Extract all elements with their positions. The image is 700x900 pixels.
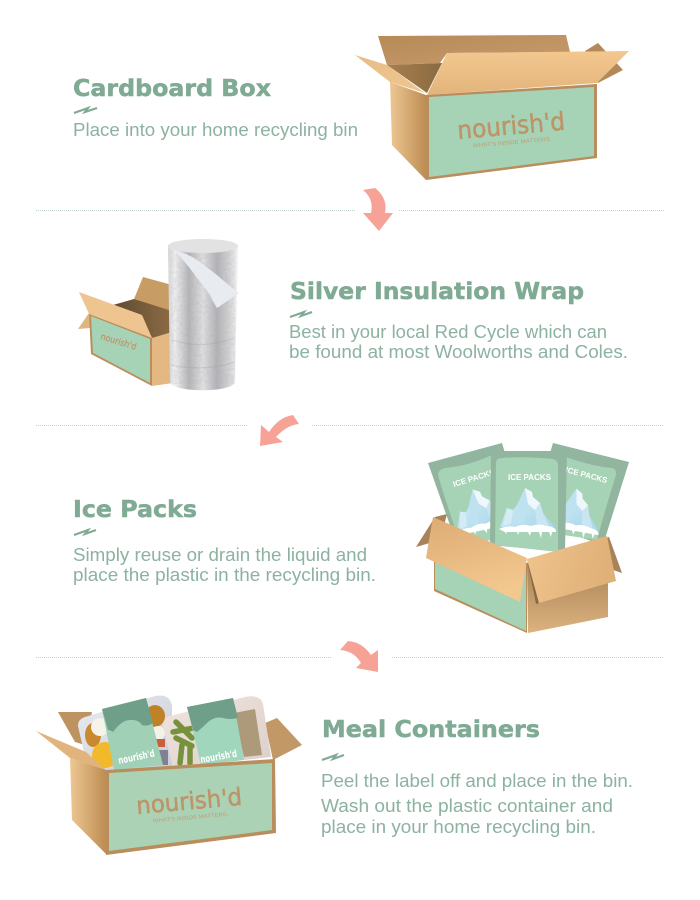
logo: nourish'd	[456, 107, 566, 145]
box left flap	[36, 731, 106, 770]
sleeve top	[187, 698, 238, 732]
food right	[145, 705, 165, 727]
box front	[434, 558, 527, 633]
pack inner	[438, 453, 525, 548]
icon: squiggle	[74, 108, 97, 113]
icon: squiggle	[290, 312, 312, 317]
ice pack left	[428, 443, 525, 548]
illustration: meal containers in box	[36, 695, 302, 855]
section: silver wrap text	[289, 279, 628, 362]
roll texture	[170, 250, 235, 384]
ice pack centre	[490, 451, 567, 552]
box rear right flap	[585, 43, 623, 83]
roll body	[168, 245, 238, 390]
sleeve body	[102, 698, 163, 770]
box side	[70, 758, 106, 854]
grain	[234, 709, 262, 757]
box front label	[435, 558, 526, 631]
box rear left flap	[58, 712, 92, 745]
food orange	[85, 723, 101, 747]
divider 1	[36, 210, 664, 212]
body text: Best in your local Red Cycle which can	[289, 322, 607, 342]
box right side	[152, 332, 173, 386]
tray right	[163, 696, 271, 768]
illustration: open cardboard box with nourish'd logo	[355, 35, 629, 180]
box label	[109, 763, 272, 851]
body text line 3: place in your home recycling bin.	[321, 817, 596, 837]
pack inner	[495, 457, 558, 552]
tray body	[163, 696, 271, 768]
logo: nourish'd	[135, 783, 243, 820]
curled sheet	[173, 250, 239, 308]
arrow 1	[363, 188, 393, 231]
yellow soup	[92, 742, 118, 768]
iceberg	[449, 483, 511, 541]
pack title: ICE PACKS	[564, 465, 609, 485]
pack body	[428, 443, 525, 548]
food white	[91, 718, 109, 736]
box interior	[113, 299, 172, 338]
section: ice packs text	[73, 497, 376, 585]
food egg	[151, 726, 165, 740]
tray left	[78, 695, 172, 770]
tray body	[78, 695, 172, 770]
iceberg	[544, 485, 605, 541]
pack title: ICE PACKS	[452, 468, 496, 489]
box rear left flap	[416, 514, 447, 547]
sleeve logo: nourish'd	[200, 749, 238, 766]
divider 3	[36, 656, 664, 658]
roll seams	[171, 338, 235, 368]
bean 1	[176, 722, 192, 738]
box rear flap	[134, 277, 172, 312]
sleeve logo: nourish'd	[117, 748, 156, 767]
green beans	[173, 722, 194, 763]
bean 2	[173, 728, 194, 732]
sleeve left	[102, 698, 163, 770]
bean 4	[180, 745, 182, 763]
section: cardboard box text	[73, 76, 358, 140]
roll top	[168, 239, 238, 253]
body text: Peel the label off and place in the bin.	[321, 771, 633, 791]
arrow 3	[340, 641, 378, 672]
sleeve top	[102, 698, 153, 732]
box front flap	[79, 292, 152, 338]
box side	[390, 82, 426, 180]
body text line 2: be found at most Woolworths and Coles.	[289, 342, 628, 362]
box label panel	[429, 87, 594, 177]
box front	[426, 84, 597, 180]
box logo: nourish'd	[99, 332, 137, 353]
box flap shadow	[527, 559, 539, 604]
pack body	[490, 451, 567, 552]
body text line 2: place the plastic in the recycling bin.	[73, 565, 376, 585]
box label	[91, 316, 150, 383]
box small left flap	[78, 313, 90, 329]
tagline: WHAT'S INSIDE MATTERS.	[153, 812, 229, 824]
body text line 2: Wash out the plastic container and	[321, 796, 613, 816]
heading: Silver Insulation Wrap: Silver Insulation Wrap	[290, 279, 584, 305]
illustration: small box and silver insulation roll	[78, 239, 239, 390]
box rear right flap	[600, 537, 622, 573]
food dark	[158, 750, 168, 765]
pack body	[530, 443, 629, 545]
box interior	[387, 63, 442, 93]
heading: Ice Packs: Ice Packs	[73, 497, 197, 523]
box left flap	[426, 517, 527, 602]
box left flap	[355, 55, 425, 93]
tagline: WHAT'S INSIDE MATTERS.	[473, 137, 552, 149]
box right flap	[527, 536, 616, 603]
sleeve body	[187, 698, 244, 765]
bean 3	[176, 738, 192, 746]
pack title: ICE PACKS	[508, 473, 552, 482]
icon: squiggle	[74, 530, 96, 535]
body text: Place into your home recycling bin	[73, 120, 358, 140]
heading: Meal Containers: Meal Containers	[322, 717, 540, 743]
box back flap	[378, 35, 570, 65]
body text: Simply reuse or drain the liquid and	[73, 545, 367, 565]
icon: squiggle	[322, 755, 344, 760]
sleeve right	[187, 698, 244, 766]
section: meal containers text	[321, 717, 633, 837]
box front	[106, 759, 276, 855]
box rear right flap	[265, 718, 302, 760]
heading: Cardboard Box: Cardboard Box	[73, 76, 271, 102]
food tomato	[156, 739, 165, 747]
box right side	[527, 563, 608, 633]
pack inner	[530, 455, 616, 540]
iceberg	[499, 488, 556, 538]
arrow 2	[260, 415, 299, 446]
box front flap	[427, 51, 629, 95]
ice pack right	[530, 443, 629, 545]
divider 2	[36, 424, 664, 426]
bean 5	[187, 748, 193, 763]
illustration: ice packs in box	[416, 443, 629, 633]
box front	[89, 313, 152, 386]
